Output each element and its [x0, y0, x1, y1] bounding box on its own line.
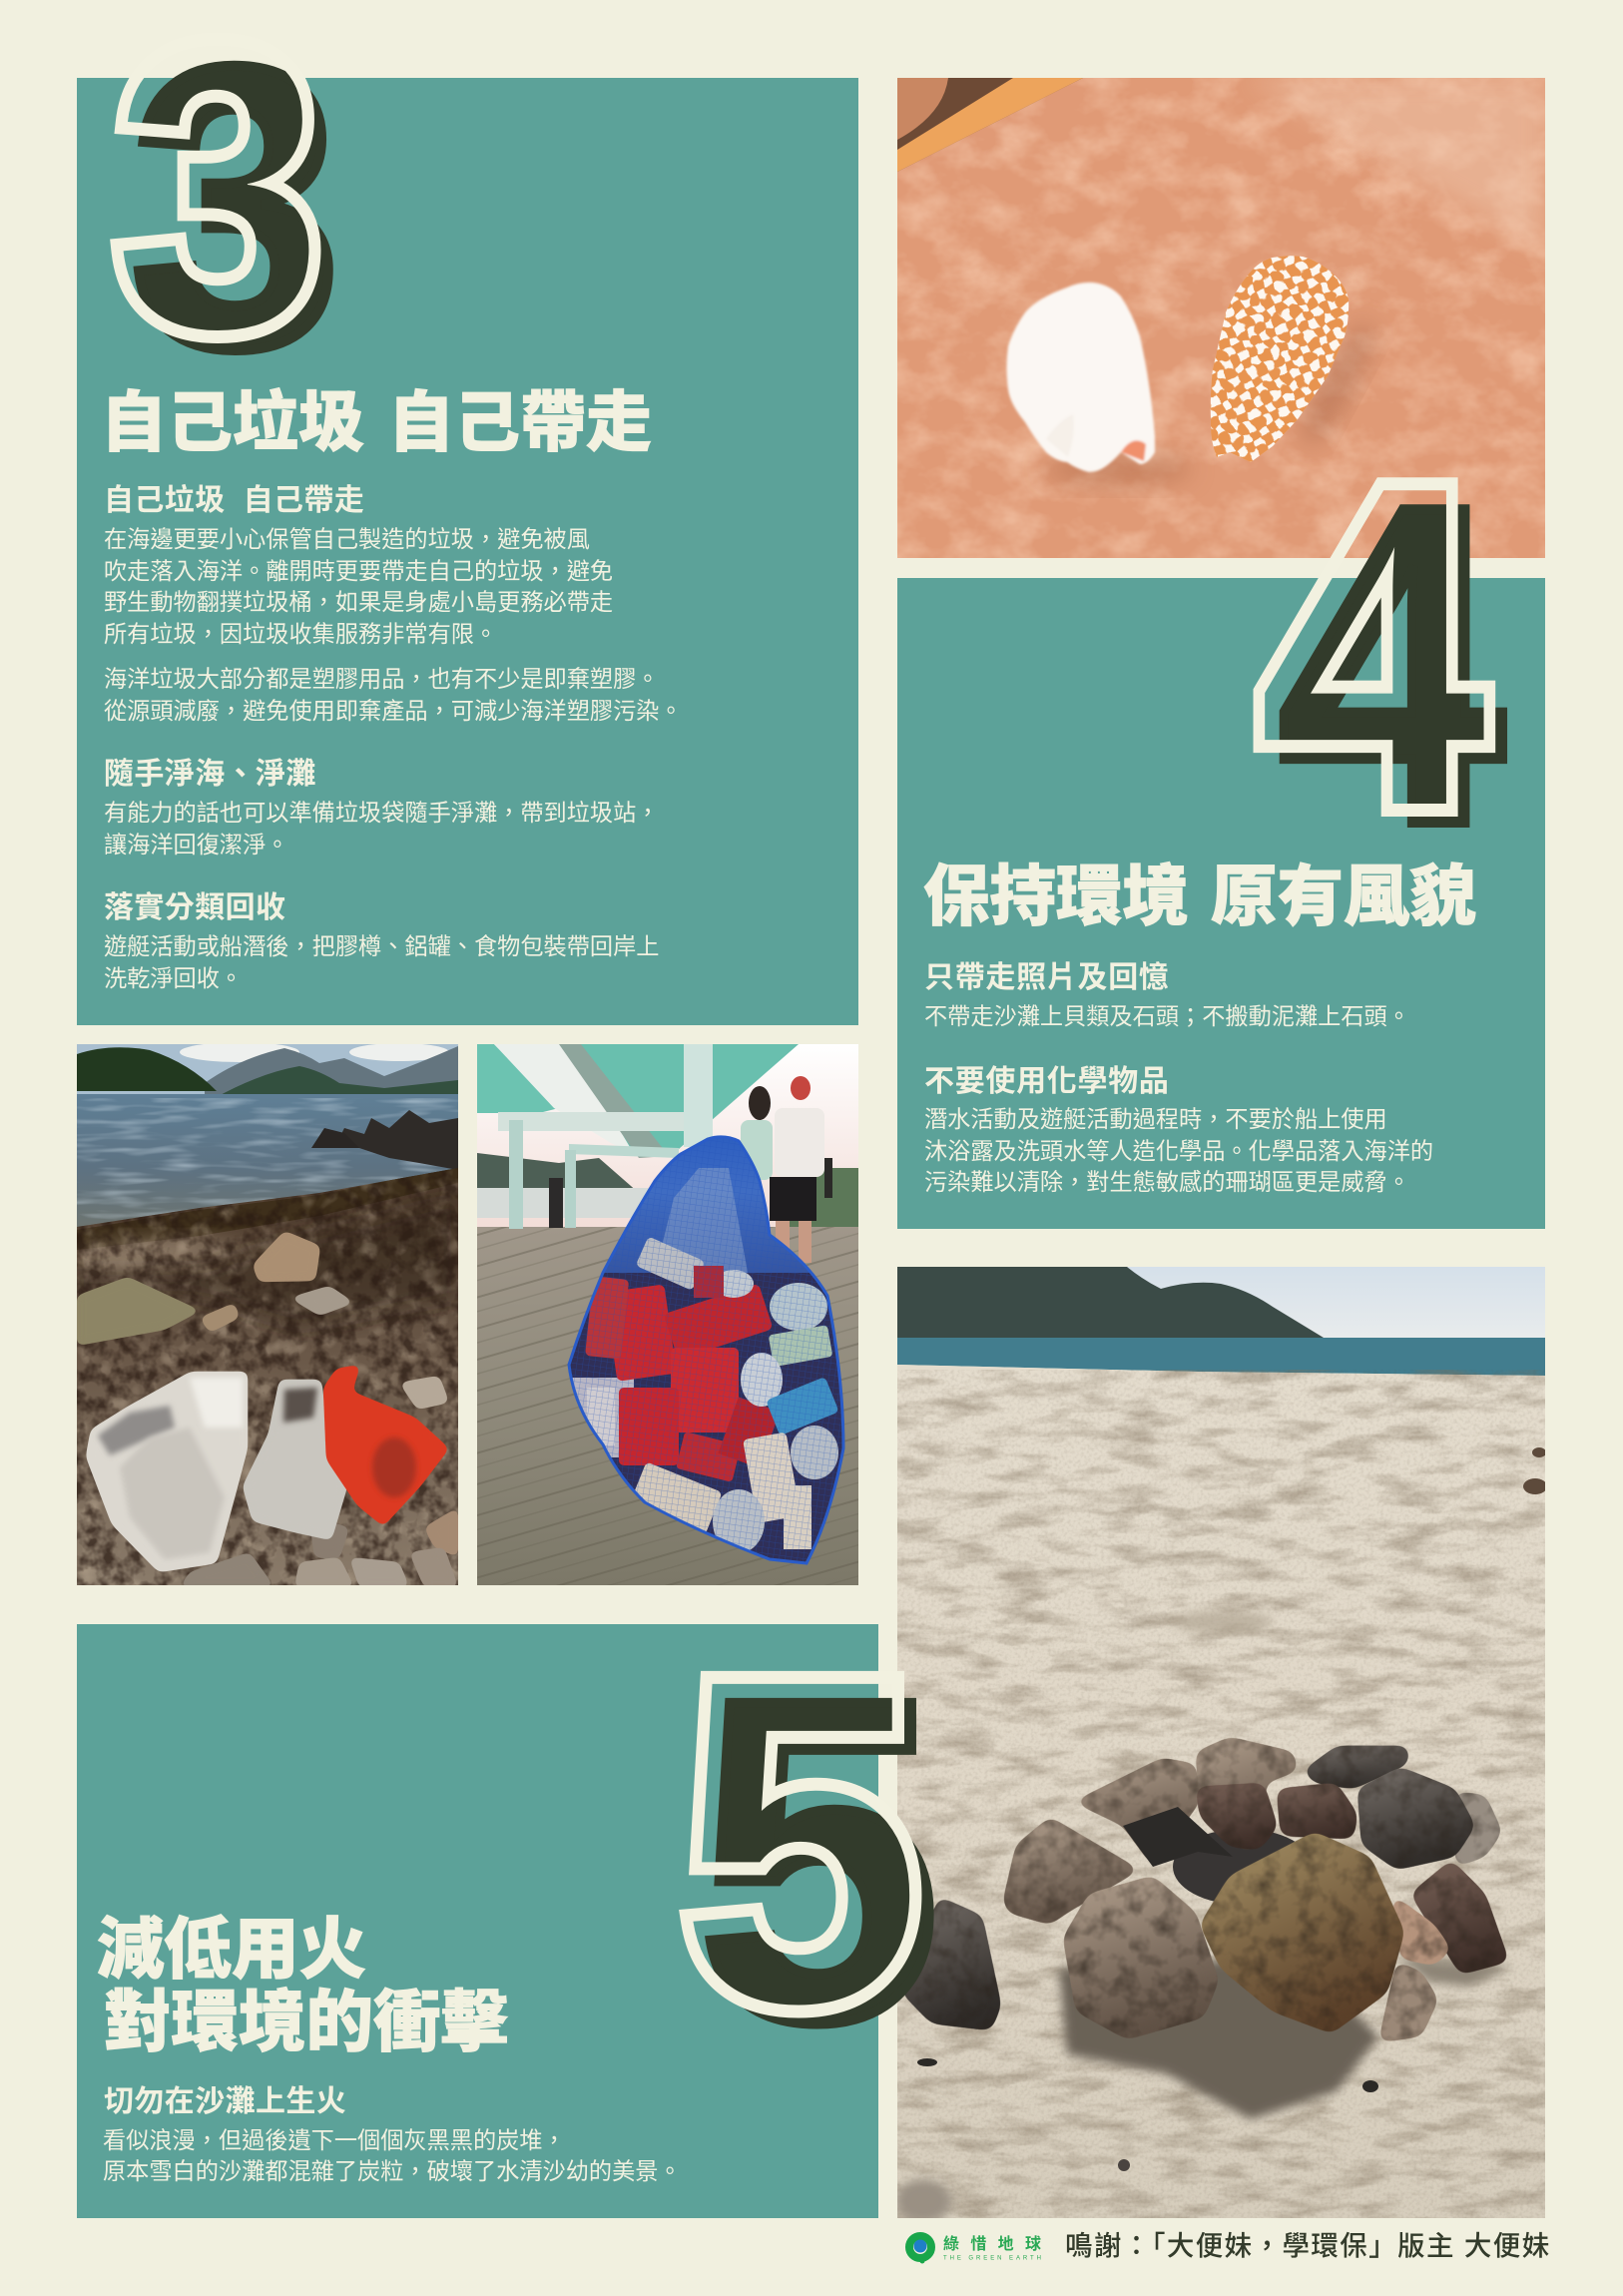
- panel: 5 reduce fire: [77, 1624, 878, 2218]
- mountains: [477, 1153, 654, 1208]
- text block: no chemicals: 潛水活動及遊艇活動過程時，不要於船上使用: [924, 1106, 1387, 1132]
- people: [741, 1120, 773, 1180]
- text block: recycling: 遊艇活動或船潛後，把膠樽、鋁罐、食物包裝帶回岸上: [104, 933, 659, 959]
- photo: bag of collected cans on pier: [477, 1044, 858, 1585]
- icon: white plastic bags: [86, 1372, 248, 1572]
- text block: own rubbish: 野生動物翻撲垃圾桶，如果是身處小島更務必帶走: [104, 589, 613, 615]
- icon: grey plastic bag: [243, 1380, 347, 1540]
- rocks: [77, 1231, 458, 1587]
- text block: take only photos: 不帶走沙灘上貝類及石頭；不搬動泥灘上石頭。: [924, 1003, 1410, 1029]
- text block: own rubbish: 所有垃圾，因垃圾收集服務非常有限。: [104, 621, 497, 647]
- text block: clean up: 讓海洋回復潔淨。: [104, 831, 289, 857]
- photo: rubbish bags on beach: [77, 1044, 458, 1585]
- text block: plastic: 從源頭減廢，避免使用即棄產品，可減少海洋塑膠污染。: [104, 697, 683, 723]
- text block: own rubbish: 在海邊更要小心保管自己製造的垃圾，避免被風: [104, 526, 590, 552]
- logo: the green earth: [905, 2232, 1041, 2264]
- heading: take your rubbish with you: 自己垃圾 自己帶走: [101, 385, 652, 459]
- text block: no fires on beach: 原本雪白的沙灘都混雜了炭粒，破壞了水清沙幼的美景。: [103, 2158, 682, 2184]
- subheading: own rubbish: 自己垃圾 自己帶走: [104, 484, 364, 517]
- logo wordmark: THE GREEN EARTH: [943, 2256, 1041, 2262]
- text block: clean up: [104, 800, 659, 857]
- numeral 5: 5: [697, 1603, 941, 2117]
- text block: recycling: 洗乾淨回收。: [104, 964, 243, 990]
- shadow under stones: [1059, 1957, 1378, 2119]
- text block: recycling: [104, 933, 659, 990]
- subheading: no fires on beach: 切勿在沙灘上生火: [104, 2085, 346, 2118]
- text block: no chemicals: [924, 1106, 1433, 1195]
- numeral 3: [110, 60, 333, 355]
- numeral 4: 4: [1278, 411, 1507, 919]
- hill: [897, 1267, 1324, 1338]
- credit line: 鳴謝：「大便妹，學環保」版主 大便妹: [1065, 2230, 1551, 2261]
- icon: white shell: [1006, 283, 1155, 472]
- text block: clean up: 有能力的話也可以準備垃圾袋隨手淨灘，帶到垃圾站，: [104, 800, 659, 826]
- icon: patterned cone shell: [1210, 256, 1350, 462]
- logo wordmark: 綠惜地球: [943, 2234, 1041, 2253]
- text block: no chemicals: 污染難以清除，對生態敏感的珊瑚區更是威脅。: [924, 1169, 1410, 1195]
- heading: keep environment as it is: 保持環境 原有風貌: [923, 861, 1476, 934]
- text block: plastic: 海洋垃圾大部分都是塑膠用品，也有不少是即棄塑膠。: [104, 666, 659, 692]
- text block: own rubbish: 吹走落入海洋。離開時更要帶走自己的垃圾，避免: [104, 557, 613, 583]
- pillars: [509, 1120, 523, 1229]
- text block: no fires on beach: 看似浪漫，但過後遺下一個個灰黑黑的炭堆，: [103, 2126, 566, 2152]
- subheading: take only photos: 只帶走照片及回憶: [924, 961, 1170, 994]
- icon: red plastic bag: [323, 1365, 449, 1526]
- heading: reduce fire impact: [97, 1913, 509, 2060]
- heading: reduce fire impact: 減低用火: [97, 1913, 366, 1988]
- text block: own rubbish: [104, 526, 613, 647]
- photo: two shells on rock: [897, 78, 1545, 558]
- text block: no chemicals: 沐浴露及洗頭水等人造化學品。化學品落入海洋的: [924, 1138, 1433, 1164]
- text block: no fires on beach: [103, 2126, 682, 2184]
- icon: blue net bag with cans: [559, 1128, 858, 1567]
- sand: [897, 1365, 1545, 2218]
- numeral 4: [1254, 477, 1507, 828]
- icon: fire ring stones: [901, 1737, 1509, 2042]
- breakwater rocks: [334, 1110, 458, 1170]
- heading: reduce fire impact: 對環境的衝擊: [104, 1986, 508, 2060]
- icon: green ring: [909, 2236, 931, 2264]
- burnt patch: [1123, 1807, 1233, 1867]
- numeral 5: [679, 1671, 934, 2028]
- photo: beach with burnt stone fire ring: [897, 1267, 1545, 2218]
- logo wordmark: [943, 2234, 1041, 2262]
- big numerals: [110, 60, 1507, 2028]
- panel: 3 rubbish: [77, 78, 858, 1025]
- text block: plastic: [104, 666, 683, 723]
- panel: 4 keep environment: [897, 578, 1545, 1229]
- sea: [897, 1338, 1545, 1376]
- subheading: recycling: 落實分類回收: [104, 891, 285, 924]
- canopy: [569, 1044, 799, 1156]
- subheading: clean up: 隨手淨海、淨灘: [104, 758, 316, 791]
- subheading: no chemicals: 不要使用化學物品: [924, 1065, 1170, 1098]
